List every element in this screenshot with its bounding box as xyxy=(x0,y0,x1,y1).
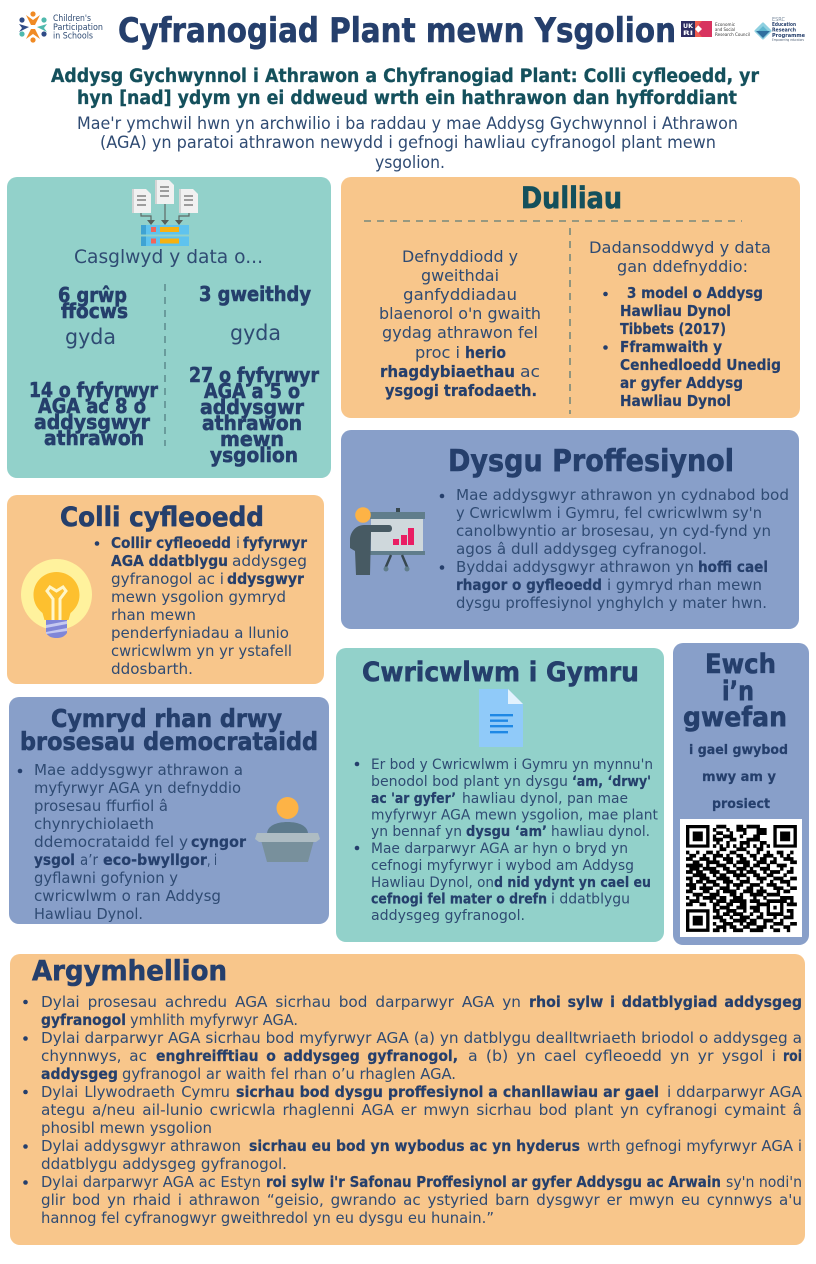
left text: Defnyddiodd y xyxy=(402,247,518,266)
recommendations list: rhoi sylw i ddatblygiad addysgeg xyxy=(529,993,802,1011)
panel: Dulliau xyxy=(341,177,800,418)
right column: workshops: gyda xyxy=(230,321,281,345)
intro text: (AGA) yn paratoi athrawon newydd i gefnogi hawliau cyfranogol plant mewn xyxy=(100,133,716,152)
caption: prosiect xyxy=(712,796,771,812)
recommendations list: gyfranogol ar waith fel rhan o’u rhaglen AGA. xyxy=(122,1065,456,1083)
right text xyxy=(589,238,781,410)
bullet text xyxy=(440,486,789,612)
subtitle: hyn [nad] ydym yn ei ddweud wrth ein hathrawon dan hyfforddiant xyxy=(77,88,737,109)
right text: gan ddefnyddio: xyxy=(617,257,748,276)
left text: ac xyxy=(520,362,540,381)
recommendations list: addysgeg xyxy=(41,1065,118,1083)
bullet text: rhan mewn xyxy=(111,606,196,624)
recommendations list: enghreifftiau o addysgeg gyfranogol, xyxy=(156,1047,458,1065)
bullet text: Er bod y Cwricwlwm i Gymru yn mynnu'n xyxy=(371,757,653,773)
right text: 3 model o Addysg xyxy=(627,284,763,302)
recommendations list: phosibl mewn ysgolion xyxy=(41,1119,212,1137)
right column: workshops: ysgolion xyxy=(210,443,298,467)
heading xyxy=(20,704,318,756)
bullet text: ysgol xyxy=(34,851,75,869)
subtitle: Addysg Gychwynnol i Athrawon a Chyfranogiad Plant: Colli cyfleoedd, yr xyxy=(51,66,760,87)
heading: Ewch xyxy=(705,649,776,680)
bullet text: dysgu proffesiynol ynghylch y mater hwn. xyxy=(456,594,767,612)
right text: Tibbets (2017) xyxy=(620,320,726,338)
left text: ysgogi trafodaeth. xyxy=(385,381,537,400)
recommendations list: wrth gefnogi myfyrwyr AGA i xyxy=(587,1137,802,1155)
bullet text xyxy=(355,757,658,924)
recommendations list: Dylai darparwyr AGA sicrhau bod myfyrwyr AGA (a) yn datblygu dealltwriaeth briodol o addysgeg a xyxy=(41,1029,802,1047)
bullet text: ac 'ar gyfer’ xyxy=(371,791,456,807)
intro text xyxy=(77,114,738,172)
right column: workshops: addysgwr xyxy=(200,395,305,419)
heading: i’n xyxy=(722,676,754,707)
heading: Colli cyfleoedd: Colli cyfleoedd xyxy=(60,502,264,533)
bullet text: agos â dull addysgeg cyfranogol. xyxy=(456,540,707,558)
left text: blaenorol o'n gwaith xyxy=(379,304,541,323)
right column: workshops: mewn xyxy=(220,427,284,451)
recommendations list: chynnwys, ac xyxy=(41,1047,147,1065)
recommendations list: roi xyxy=(783,1047,802,1065)
bullet text: addysgeg xyxy=(232,552,307,570)
left column: focus groups: AGA ac 8 o xyxy=(38,394,146,418)
right column: workshops xyxy=(189,282,320,467)
logo: UKRI ESRC: Economic xyxy=(715,22,735,27)
recommendations list: ymhlith myfyrwyr AGA. xyxy=(130,1011,298,1029)
recommendations list: roi sylw i'r Safonau Proffesiynol ar gyfer Addysgu ac Arwain xyxy=(266,1173,721,1191)
right text: Hawliau Dynol xyxy=(620,392,731,410)
logo: UKRI ESRC: Programme xyxy=(772,33,806,39)
bullet text: i gymryd rhan mewn xyxy=(607,576,762,594)
logo: UKRI ESRC: Empowering educators xyxy=(772,38,804,42)
intro text: ysgolion. xyxy=(375,153,445,172)
recommendations list: Dylai prosesau achredu AGA sicrhau bod darparwyr AGA yn xyxy=(41,993,521,1011)
recommendations list: glir bod yn rhaid i athrawon “geisio, gwrando ac ystyried barn dysgwyr er mwyn eu cynnwys a'u xyxy=(41,1191,802,1209)
bullet text: cwricwlwm o ran Addysg xyxy=(34,887,221,905)
bullet text: chynrychiolaeth xyxy=(34,815,154,833)
bullet text: i xyxy=(236,534,240,552)
bullet text: AGA ddatblygu xyxy=(111,552,228,570)
recommendations list: sicrhau bod dysgu proffesiynol a chanllawiau ar gael xyxy=(236,1083,659,1101)
icon: person at podium xyxy=(255,797,320,862)
bullet text: i ddatblygu xyxy=(551,892,630,908)
left column: focus groups: 6 grŵp xyxy=(58,283,127,307)
bullet text: canolbwyntio ar brosesau, yn cyd-fynd yn xyxy=(456,522,771,540)
panel: data collection xyxy=(7,177,331,478)
recommendations list: Dylai Llywodraeth Cymru xyxy=(41,1083,230,1101)
left text: gydag athrawon fel xyxy=(382,323,538,342)
bullet text: cwricwlwm yn yr ystafell xyxy=(111,642,292,660)
recommendations list: gyfranogol xyxy=(41,1011,126,1029)
logo: UKRI ESRC: RI xyxy=(683,29,693,37)
caption xyxy=(689,742,788,812)
bullet text: Hawliau Dynol, on xyxy=(371,875,494,891)
bullet text: Mae addysgwyr athrawon a xyxy=(34,761,243,779)
recommendations list: sy'n nodi'n xyxy=(726,1173,802,1191)
left column: focus groups: addysgwyr xyxy=(34,410,151,434)
logo: UKRI ESRC: Research xyxy=(772,28,797,34)
left column: focus groups: 14 o fyfyrwyr xyxy=(29,378,159,402)
recommendations list xyxy=(23,993,803,1227)
caption: i gael gwybod xyxy=(689,742,788,758)
icon: light bulb xyxy=(21,559,92,638)
bullet text: eco-bwyllgor xyxy=(103,851,208,869)
QR code xyxy=(680,819,802,937)
bullet text: cefnogi fel mater o drefn xyxy=(371,892,547,908)
right text: Fframwaith y xyxy=(620,338,722,356)
heading xyxy=(683,649,787,733)
intro text: Mae'r ymchwil hwn yn archwilio i ba raddau y mae Addysg Gychwynnol i Athrawon xyxy=(77,114,738,133)
recommendations list: Dylai darparwyr AGA ac Estyn xyxy=(41,1173,261,1191)
left text: rhagdybiaethau xyxy=(380,362,515,381)
bullet text: Byddai addysgwyr athrawon yn xyxy=(456,558,694,576)
icon: documents into database xyxy=(132,180,198,246)
heading: Argymhellion xyxy=(32,954,227,987)
bullet text: , i xyxy=(207,851,217,869)
recommendations list: a (b) yn cael cyfleoedd yn yr ysgol i xyxy=(468,1047,776,1065)
bullet text: myfyrwyr AGA mewn ysgolion, mae plant xyxy=(371,808,658,824)
intro label: Casglwyd y data o... xyxy=(74,246,263,268)
left column: focus groups: gyda xyxy=(65,325,116,349)
bullet text: rhagor o gyfleoedd xyxy=(456,576,602,594)
bullet text: yn bennaf yn xyxy=(371,824,462,840)
bullet text: d nid ydynt yn cael eu xyxy=(494,875,651,891)
left column: focus groups xyxy=(29,283,159,450)
recommendations list: Dylai addysgwyr athrawon xyxy=(41,1137,241,1155)
recommendations list: hannog fel cyfranogwyr gweithredol yn eu dysgu eu hunain.” xyxy=(41,1209,494,1227)
right text: Dadansoddwyd y data xyxy=(589,238,771,257)
icon: presenter with chart xyxy=(350,507,425,575)
caption: mwy am y xyxy=(702,769,776,785)
bullet text: a’r xyxy=(80,851,99,869)
recommendations list: ddatblygu addysgeg gyfranogol. xyxy=(41,1155,287,1173)
icon: document xyxy=(479,689,523,747)
bullet text: ddemocrataidd fel y xyxy=(34,833,188,851)
bullet text: Hawliau Dynol. xyxy=(34,905,143,923)
subtitle xyxy=(51,66,760,109)
bullet text: dysgu ‘am’ xyxy=(466,824,547,840)
left text: gweithdai xyxy=(421,266,499,285)
logo: UKRI ESRC: ESRC xyxy=(772,17,786,23)
recommendations list: i ddarparwyr AGA xyxy=(667,1083,803,1101)
logo: UKRI ESRC: Education xyxy=(772,22,797,28)
logo: UKRI ESRC: and Social xyxy=(715,27,735,32)
bullet text xyxy=(18,761,247,923)
bullet text: ddysgwyr xyxy=(227,570,305,588)
right text: Cenhedloedd Unedig xyxy=(620,356,781,374)
left column: focus groups: athrawon xyxy=(44,426,144,450)
panel: Ewch i'n gwefan xyxy=(673,643,809,945)
heading: gwefan xyxy=(683,702,787,733)
right column: workshops: 3 gweithdy xyxy=(199,282,311,306)
heading: Cwricwlwm i Gymru xyxy=(362,657,639,688)
bullet text: prosesau ffurfiol â xyxy=(34,797,168,815)
logo: Children's Participation in Schools xyxy=(19,11,103,43)
bullet text: mewn ysgolion gymryd xyxy=(111,588,286,606)
left text: herio xyxy=(465,343,506,362)
bullet text: cefnogi myfyrwyr i wybod am Addysg xyxy=(371,858,634,874)
bullet text: cyngor xyxy=(191,833,247,851)
logo: Children's Participation in Schools: Participation xyxy=(53,22,103,32)
panel: Argymhellion xyxy=(10,954,805,1245)
bullet text: hoffi cael xyxy=(698,558,768,576)
bullet text: penderfyniadau a llunio xyxy=(111,624,289,642)
left column: focus groups: ffocws xyxy=(61,299,128,323)
panel: Cwricwlwm i Gymru xyxy=(336,648,664,942)
bullet text: y Cwricwlwm i Gymru, fel cwricwlwm sy'n xyxy=(456,504,762,522)
heading: Dulliau: Dulliau xyxy=(521,181,622,215)
panel: Colli cyfleoedd xyxy=(7,495,324,684)
bullet text: Mae addysgwyr athrawon yn cydnabod bod xyxy=(456,486,789,504)
bullet text: myfyrwyr AGA yn defnyddio xyxy=(34,779,241,797)
left text: proc i xyxy=(415,343,460,362)
bullet text: hawliau dynol, pan mae xyxy=(462,791,628,807)
logo: UKRI ESRC xyxy=(681,17,806,42)
right column: workshops: AGA a 5 o xyxy=(204,379,300,403)
bullet text: benodol bod plant yn dysgu xyxy=(371,774,568,790)
right text: Hawliau Dynol xyxy=(620,302,731,320)
right column: workshops: 27 o fyfyrwyr xyxy=(189,363,320,387)
bullet text: Collir cyfleoedd xyxy=(111,534,231,552)
bullet text: ddosbarth. xyxy=(111,660,193,678)
recommendations list: sicrhau eu bod yn wybodus ac yn hyderus xyxy=(249,1137,580,1155)
logo: Children's Participation in Schools: in Schools xyxy=(53,30,93,40)
right column: workshops: athrawon xyxy=(202,411,302,435)
right text: ar gyfer Addysg xyxy=(620,374,743,392)
bullet text: ‘am, ‘drwy' xyxy=(572,774,651,790)
panel: Dysgu Proffesiynol xyxy=(341,430,799,629)
logo: Children's Participation in Schools: Children's xyxy=(53,13,91,23)
bullet text: gyfranogol ac i xyxy=(111,570,224,588)
panel: Cymryd rhan drwy brosesau democrataidd xyxy=(9,697,329,924)
left text xyxy=(379,247,541,400)
heading: brosesau democrataidd xyxy=(20,727,318,756)
bullet text: hawliau dynol. xyxy=(551,824,650,840)
bullet text: Mae darparwyr AGA ar hyn o bryd yn xyxy=(371,841,628,857)
heading: Dysgu Proffesiynol xyxy=(448,444,734,479)
heading: Cymryd rhan drwy xyxy=(51,704,282,733)
bullet text: gyflawni gofynion y xyxy=(34,869,178,887)
left text: ganfyddiadau xyxy=(403,285,517,304)
title: Cyfranogiad Plant mewn Ysgolion xyxy=(118,11,676,51)
logo: UKRI ESRC: UK xyxy=(683,22,694,30)
recommendations list: ategu a/neu ail-lunio cwricwla rhaglenni AGA er mwyn sicrhau bod plant yn cyfranogi cymaint â xyxy=(41,1101,802,1119)
bullet text: addysgeg gyfranogol. xyxy=(371,908,525,924)
logo: UKRI ESRC: Research Council xyxy=(715,32,750,37)
bullet text xyxy=(95,534,308,678)
bullet text: fyfyrwyr xyxy=(243,534,308,552)
